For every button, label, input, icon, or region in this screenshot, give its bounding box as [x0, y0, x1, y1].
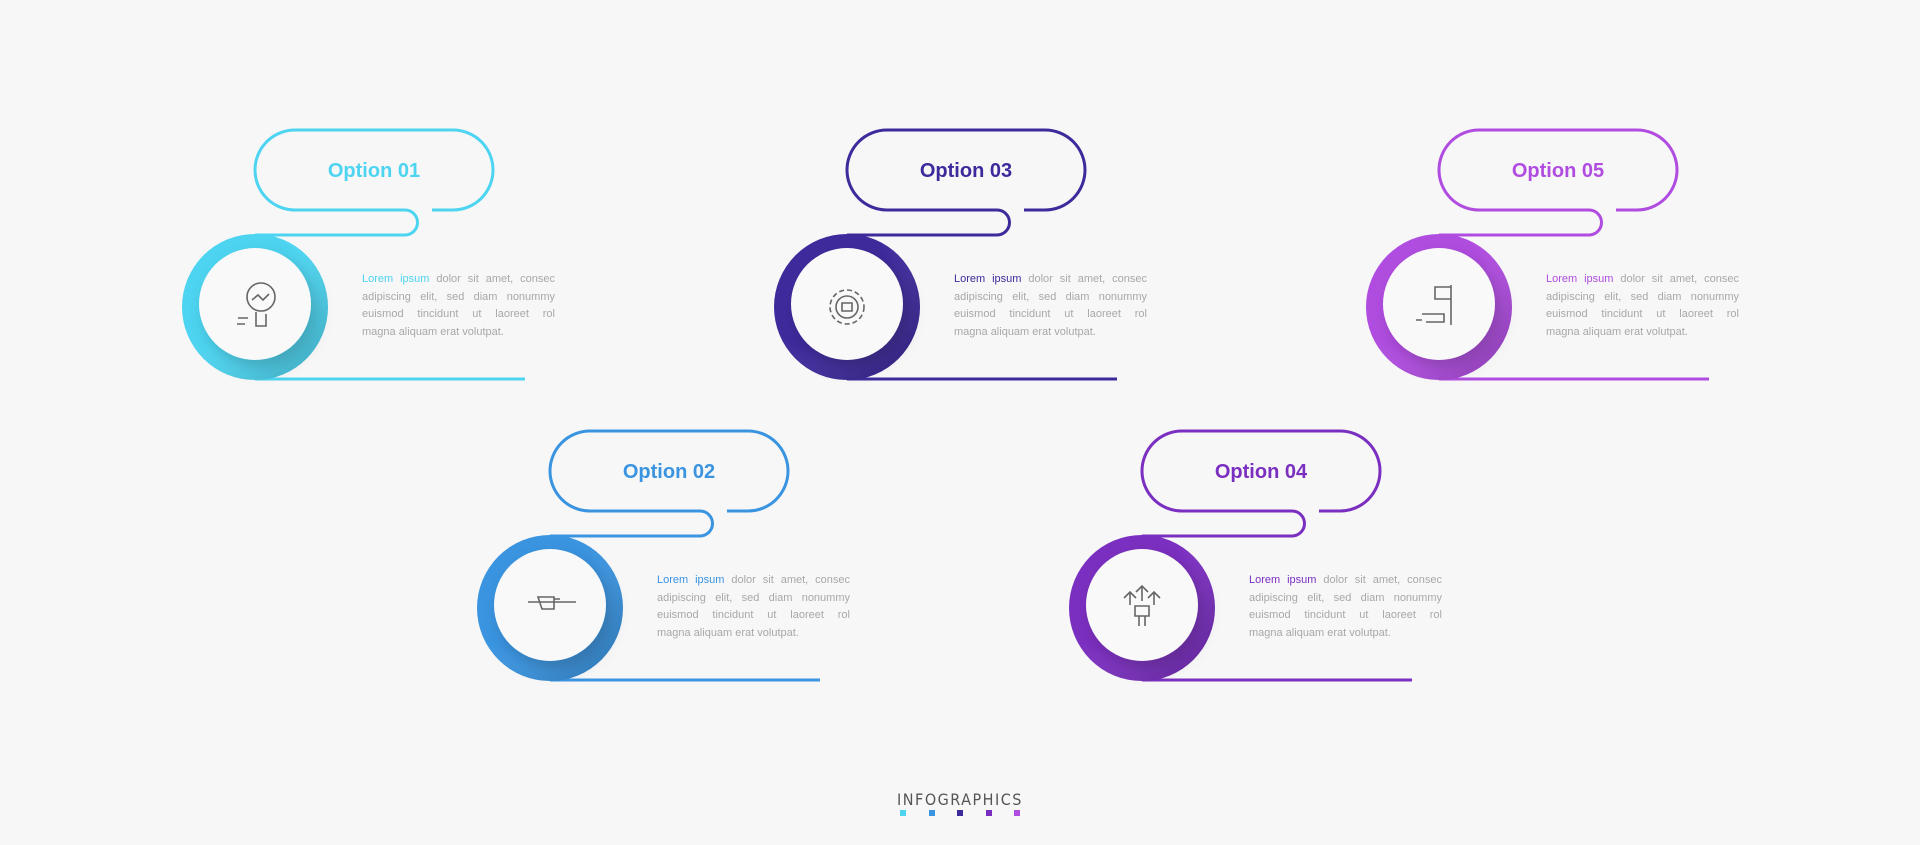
- option 01: Option 01: [328, 160, 420, 182]
- text: option 01: magna aliquam erat volutpat.: [362, 326, 504, 338]
- text: option 04: magna aliquam erat volutpat.: [1249, 626, 1391, 638]
- icon: gear fist: [830, 290, 864, 324]
- icon: arrows fist: [1124, 586, 1160, 626]
- text: option 03: magna aliquam erat volutpat.: [954, 326, 1096, 338]
- option 05: [1366, 130, 1709, 380]
- option 03: [774, 130, 1117, 380]
- text: option 05: [1546, 273, 1739, 338]
- option 04: [1069, 431, 1412, 681]
- text: option 01: euismod tincidunt ut laoreet rol: [362, 308, 555, 320]
- option 04: Option 04: [1215, 461, 1308, 483]
- text: option 04: euismod tincidunt ut laoreet rol: [1249, 609, 1442, 621]
- text: option 05: Lorem ipsum dolor sit amet, consec: [1546, 273, 1739, 285]
- text: option 01: [362, 273, 555, 338]
- text: option 05: magna aliquam erat volutpat.: [1546, 326, 1688, 338]
- text: option 03: [954, 273, 1147, 338]
- text: option 01: adipiscing elit, sed diam nonummy: [362, 290, 555, 302]
- footer squares: [900, 810, 1020, 816]
- text: option 02: magna aliquam erat volutpat.: [657, 626, 799, 638]
- text: option 04: [1249, 574, 1442, 638]
- text: option 03: adipiscing elit, sed diam nonummy: [954, 290, 1147, 302]
- text: option 04: adipiscing elit, sed diam nonummy: [1249, 592, 1442, 604]
- option 02: [477, 431, 820, 681]
- text: option 01: Lorem ipsum dolor sit amet, consec: [362, 273, 555, 285]
- text: option 05: euismod tincidunt ut laoreet rol: [1546, 308, 1739, 320]
- text: option 02: euismod tincidunt ut laoreet rol: [657, 609, 850, 621]
- option 05: Option 05: [1512, 160, 1604, 182]
- text: option 03: Lorem ipsum dolor sit amet, consec: [954, 273, 1147, 285]
- text: option 03: euismod tincidunt ut laoreet rol: [954, 308, 1147, 320]
- footer title: INFOGRAPHICS: [897, 790, 1023, 809]
- text: option 04: Lorem ipsum dolor sit amet, consec: [1249, 574, 1442, 586]
- text: option 02: adipiscing elit, sed diam nonummy: [657, 592, 850, 604]
- icon: magnifier hand: [237, 283, 275, 326]
- option 01: [182, 130, 525, 380]
- option 03: Option 03: [920, 160, 1012, 182]
- text: option 02: Lorem ipsum dolor sit amet, consec: [657, 574, 850, 586]
- text: option 02: [657, 574, 850, 638]
- option 02: Option 02: [623, 461, 715, 483]
- text: option 05: adipiscing elit, sed diam nonummy: [1546, 290, 1739, 302]
- icon: hand pen: [528, 597, 576, 609]
- icon: hand flag: [1416, 285, 1451, 325]
